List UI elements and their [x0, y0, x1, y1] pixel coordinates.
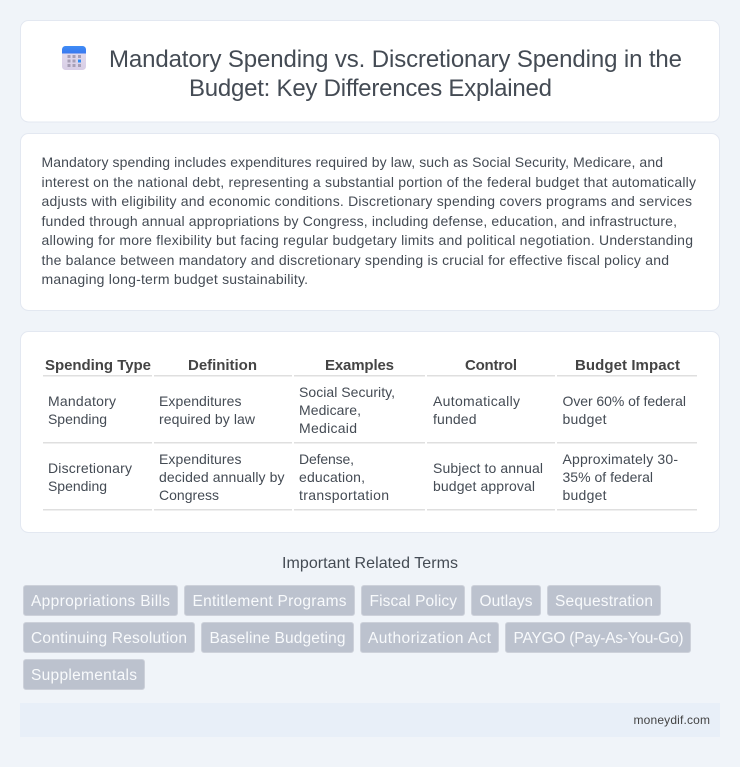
table row: discretionary spending: Approximately 30- [562, 451, 678, 467]
text block: summary paragraph: the balance between mandatory and discretionary spending is crucial for effective fiscal policy and [42, 252, 669, 268]
text block: summary paragraph: Mandatory spending includes expenditures required by law, such as Social Security, Medicare, and [42, 154, 663, 170]
table row: mandatory spending: Medicare, [299, 402, 361, 418]
tag: authorization act [360, 622, 498, 652]
table row: discretionary spending: Congress [159, 487, 219, 503]
panel: related term tags [24, 586, 690, 690]
table header row: Definition [188, 357, 257, 374]
footer source text: moneydif.com [634, 713, 710, 727]
text block: summary paragraph [42, 154, 696, 287]
table row: discretionary spending: 35% of federal [562, 469, 653, 485]
footer bar [20, 703, 720, 737]
tag: outlays [472, 586, 540, 616]
text block: summary paragraph: interest on the national debt, representing a substantial portion of the federal budget that automatically [42, 174, 696, 190]
table header row: Spending Type [45, 357, 151, 374]
table row: mandatory spending: Over 60% of federal [562, 393, 686, 409]
tag: entitlement programs [184, 586, 354, 616]
tag: appropriations bills [24, 586, 178, 616]
table row: discretionary spending: Spending [48, 478, 107, 494]
table row: mandatory spending: Expenditures [159, 393, 242, 409]
table row: mandatory spending: funded [433, 411, 476, 427]
tag: fiscal policy: Fiscal Policy [370, 593, 457, 610]
tag: fiscal policy [362, 586, 464, 616]
tag: entitlement programs: Entitlement Programs [192, 593, 347, 610]
table row: discretionary spending: budget [562, 487, 607, 503]
table row: mandatory spending: budget [562, 411, 607, 427]
table row: mandatory spending: Mandatory [48, 393, 116, 409]
table row: mandatory spending: Medicaid [299, 420, 357, 436]
table row: mandatory spending: required by law [159, 411, 256, 427]
panel: title card [20, 20, 720, 122]
table row: discretionary spending: Expenditures [159, 451, 242, 467]
table row: mandatory spending: Automatically [433, 393, 520, 409]
table row: mandatory spending: Spending [48, 411, 107, 427]
title: Budget: Key Differences Explained [189, 75, 552, 102]
panel: comparison table card [20, 332, 720, 532]
table header row: Budget Impact [575, 357, 680, 374]
heading: important related terms: Important Related Terms [282, 555, 458, 572]
title: Mandatory Spending vs. Discretionary Spending in the [109, 46, 682, 73]
text block: summary paragraph: funded through annual appropriations by Congress, including defense, education, and infrastructure, [42, 213, 677, 229]
table row: discretionary spending: education, [299, 469, 365, 485]
table row: mandatory spending [48, 384, 686, 436]
tag: paygo [506, 622, 690, 652]
table row: discretionary spending: Subject to annual [433, 460, 543, 476]
tag: sequestration [548, 586, 660, 616]
tag: continuing resolution [24, 622, 194, 652]
tag: continuing resolution: Continuing Resolution [31, 630, 187, 647]
table header row [45, 357, 680, 374]
text block: summary paragraph: managing long-term budget sustainability. [42, 271, 308, 287]
tag: baseline budgeting: Baseline Budgeting [210, 630, 346, 647]
panel: summary card [20, 134, 720, 310]
table row: discretionary spending: Defense, [299, 451, 354, 467]
icon: calendar [62, 46, 86, 70]
tag: authorization act: Authorization Act [368, 630, 492, 647]
table row: mandatory spending: Social Security, [299, 384, 395, 400]
tag: outlays: Outlays [480, 593, 533, 610]
table row: discretionary spending: transportation [299, 487, 389, 503]
tag: supplementals: Supplementals [31, 667, 137, 684]
text block: summary paragraph: allowing for more flexibility but facing regular budgetary limits and political negotiation. Understanding [42, 232, 693, 248]
title [109, 46, 682, 102]
tag: supplementals [24, 660, 144, 690]
table header row: Examples [325, 357, 394, 374]
text block: summary paragraph: adjusts with eligibility and economic conditions. Discretionary spending covers programs and services [42, 193, 692, 209]
table row: discretionary spending [48, 451, 678, 503]
tag: appropriations bills: Appropriations Bills [31, 593, 170, 610]
table row: discretionary spending: decided annually by [159, 469, 284, 485]
table row: discretionary spending: budget approval [433, 478, 535, 494]
table row: discretionary spending: Discretionary [48, 460, 132, 476]
table header row: Control [465, 357, 517, 374]
tag: paygo: PAYGO (Pay-As-You-Go) [514, 630, 684, 647]
tag: baseline budgeting [202, 622, 354, 652]
tag: sequestration: Sequestration [555, 593, 653, 610]
